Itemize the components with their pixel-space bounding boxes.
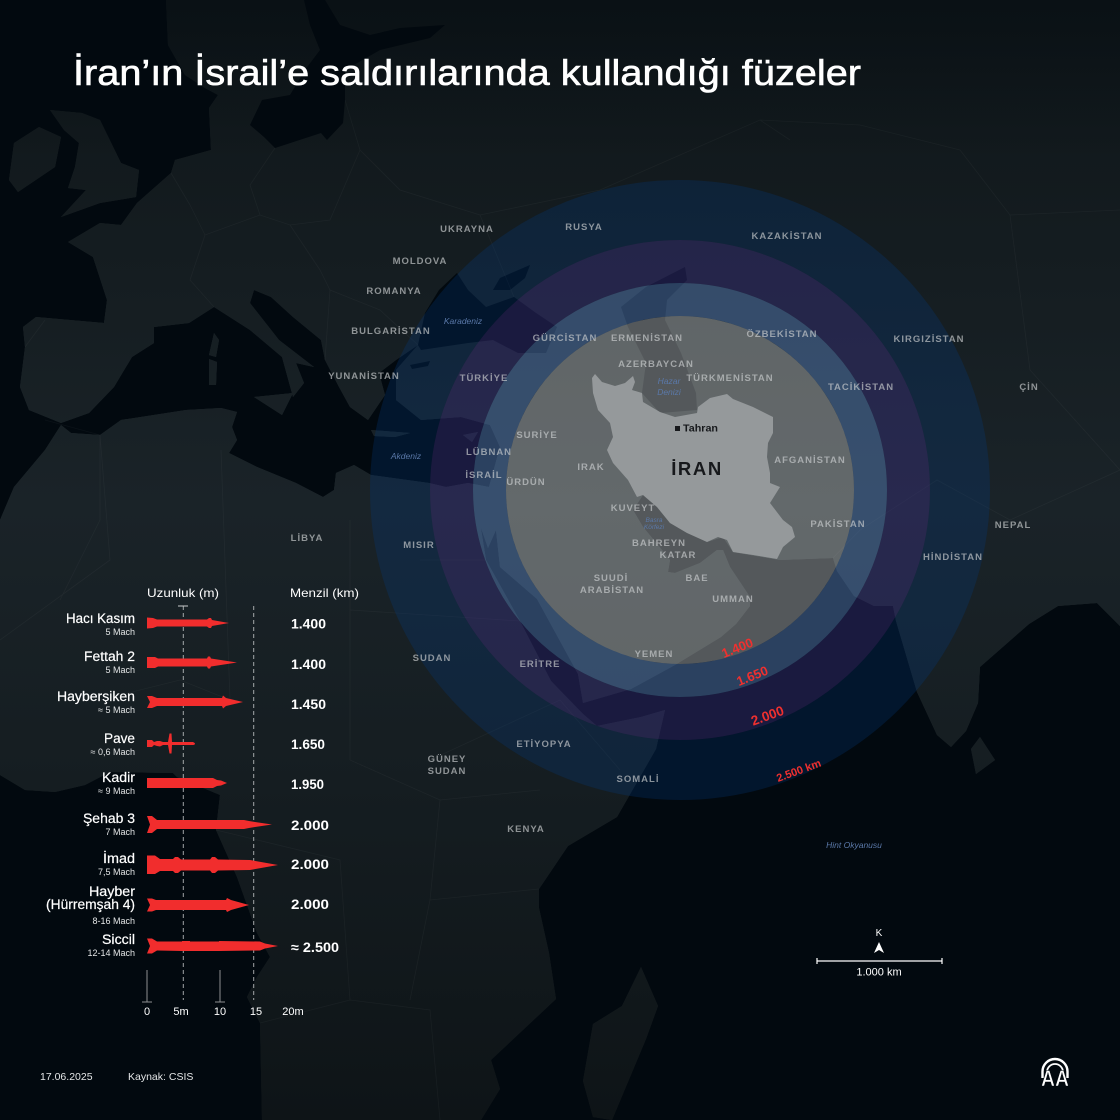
source: Kaynak: CSIS	[128, 1071, 193, 1083]
map: country and sea labels: BAHREYN	[632, 538, 686, 549]
row: Şehab 3	[83, 811, 329, 837]
row: Şehab 3: Şehab 3	[83, 811, 135, 826]
row: Hayberşiken	[57, 689, 326, 715]
row: Hayber (Hürremşah 4): Hayber	[89, 884, 136, 899]
map: country and sea labels: Hint Okyanusu	[826, 840, 882, 850]
map: country and sea labels: UMMAN	[712, 594, 754, 605]
map: country and sea labels: YUNANİSTAN	[328, 371, 400, 382]
map: country and sea labels: ÜRDÜN	[506, 477, 546, 488]
map: country and sea labels: SUDAN	[428, 766, 466, 777]
compass and scale bar: K	[876, 928, 883, 939]
map: country and sea labels: BAE	[685, 573, 709, 584]
row: Pave: Pave	[104, 731, 135, 746]
row: Hayberşiken: Hayberşiken	[57, 689, 135, 704]
map: country and sea labels: KATAR	[660, 550, 696, 561]
label: Iran and Tehran	[671, 424, 723, 479]
map: country and sea labels: Hazar	[658, 376, 681, 386]
map: country and sea labels: HİNDİSTAN	[923, 552, 983, 563]
title: İran’ın İsrail’e saldırılarında kullandığı füzeler	[73, 52, 861, 93]
row: Hayber (Hürremşah 4): (Hürremşah 4)	[46, 897, 135, 912]
row: İmad: İmad	[103, 851, 135, 866]
row: Hayber (Hürremşah 4): 8-16 Mach	[92, 916, 135, 926]
map: country and sea labels: ROMANYA	[366, 286, 422, 297]
map: country and sea labels: TÜRKİYE	[460, 373, 508, 384]
map: country and sea labels: TÜRKMENİSTAN	[686, 373, 774, 384]
range labels on the rings	[719, 635, 823, 785]
axis labels: 5m	[173, 1006, 189, 1018]
map: country and sea labels: GÜNEY	[428, 754, 466, 765]
map: country and sea labels: IRAK	[577, 462, 605, 473]
row: Pave: 1.650	[291, 737, 325, 752]
range ring: 2.000 km	[452, 262, 908, 718]
map: country and sea labels: GÜRCİSTAN	[533, 333, 597, 344]
map: country and sea labels: SURİYE	[516, 430, 558, 441]
row: Kadir: ≈ 9 Mach	[98, 786, 135, 796]
range ring: 1.650 km	[490, 300, 870, 680]
axis labels: 10	[214, 1006, 226, 1018]
map: country and sea labels: UKRAYNA	[440, 224, 494, 235]
row: Şehab 3: 2.000	[291, 818, 329, 833]
map: country and sea labels	[291, 222, 1039, 850]
map: country and sea labels: KUVEYT	[611, 503, 655, 514]
row: Hayber (Hürremşah 4)	[46, 884, 329, 926]
column heading: length: Uzunluk (m)	[147, 586, 219, 600]
row: Fettah 2	[84, 649, 326, 675]
row: Hacı Kasım: 5 Mach	[105, 627, 135, 637]
row: Kadir	[98, 770, 324, 796]
compass and scale bar	[817, 928, 942, 978]
column heading: range: Menzil (km)	[290, 586, 359, 600]
row: Pave: ≈ 0,6 Mach	[91, 747, 135, 757]
map: country and sea labels: NEPAL	[995, 520, 1031, 531]
map: country and sea labels: MOLDOVA	[393, 256, 447, 267]
map: country and sea labels: AZERBAYCAN	[618, 359, 694, 370]
map: Iran highlighted	[592, 374, 795, 559]
range labels on the rings: 1.650	[734, 663, 770, 689]
row: Kadir: Kadir	[102, 770, 136, 785]
map: country and sea labels: KAZAKİSTAN	[751, 231, 823, 242]
map: country and sea labels: TACİKİSTAN	[828, 382, 894, 393]
range ring: 2.500 km	[400, 210, 960, 770]
range circle: 1.400 km	[506, 316, 854, 664]
map: country and sea labels: KIRGIZİSTAN	[894, 334, 964, 345]
row: Siccil: ≈ 2.500	[291, 940, 339, 955]
map: country and sea labels: SUUDİ	[594, 573, 628, 584]
compass and scale bar: 1.000 km	[856, 966, 902, 978]
missile chart	[46, 586, 359, 1018]
date: 17.06.2025	[40, 1071, 93, 1083]
row: Hayberşiken: 1.450	[291, 697, 326, 712]
map: country and sea labels: ERMENİSTAN	[611, 333, 683, 344]
map: country and sea labels: İSRAİL	[465, 470, 503, 481]
map: country and sea labels: RUSYA	[565, 222, 603, 233]
map: country and sea labels: Basra	[646, 517, 663, 524]
map: country and sea labels: ARABİSTAN	[580, 585, 644, 596]
axis labels: 15	[250, 1006, 262, 1018]
row: Kadir: 1.950	[291, 777, 324, 792]
map: country and sea labels: MISIR	[403, 540, 435, 551]
label: Iran and Tehran: İRAN	[671, 458, 723, 479]
map: country and sea labels: LÜBNAN	[466, 447, 512, 458]
row: Fettah 2: 5 Mach	[105, 665, 135, 675]
range labels on the rings: 2.500 km	[775, 758, 823, 785]
map: country and sea labels: Karadeniz	[444, 316, 483, 326]
map: country and sea labels: ÇİN	[1019, 382, 1039, 393]
row: Siccil: Siccil	[102, 932, 135, 947]
row: Hacı Kasım: 1.400	[291, 616, 326, 632]
row: İmad: 7,5 Mach	[98, 867, 135, 877]
row: Siccil: 12-14 Mach	[87, 948, 135, 958]
map: country and sea labels: Körfezi	[644, 524, 665, 531]
map: country and sea labels: AFGANİSTAN	[774, 455, 846, 466]
map: country and sea labels: BULGARİSTAN	[351, 326, 431, 337]
row: Fettah 2: Fettah 2	[84, 649, 135, 664]
map: country and sea labels: ERİTRE	[520, 659, 560, 670]
length axis	[142, 606, 254, 1002]
map: country and sea labels: LİBYA	[291, 533, 323, 544]
row: İmad: 2.000	[291, 857, 329, 872]
map: country and sea labels: KENYA	[507, 824, 545, 835]
row: Şehab 3: 7 Mach	[105, 827, 135, 837]
row: Siccil	[87, 932, 339, 958]
row: Hayber (Hürremşah 4): 2.000	[291, 897, 329, 912]
map: country and sea labels: Denizi	[657, 387, 682, 397]
row: Fettah 2: 1.400	[291, 657, 326, 672]
row: İmad	[98, 851, 329, 877]
logo: AA: AA	[1041, 1066, 1069, 1091]
row: Pave	[91, 731, 325, 757]
axis labels	[144, 1006, 304, 1018]
map: country and sea labels: ÖZBEKİSTAN	[746, 329, 818, 340]
axis labels: 0	[144, 1006, 150, 1018]
map: country and sea labels: ETİYOPYA	[516, 739, 572, 750]
row: Hacı Kasım	[66, 611, 326, 637]
range labels on the rings: 1.400	[719, 635, 755, 661]
map: country and sea labels: SUDAN	[413, 653, 451, 664]
row: Hacı Kasım: Hacı Kasım	[66, 611, 135, 626]
map: country and sea labels: SOMALİ	[617, 774, 659, 785]
map: country and sea labels: YEMEN	[635, 649, 673, 660]
axis labels: 20m	[282, 1006, 304, 1018]
label: Iran and Tehran: Tahran	[683, 424, 718, 434]
range labels on the rings: 2.000	[749, 703, 786, 729]
map: country and sea labels: PAKİSTAN	[810, 519, 866, 530]
row: Hayberşiken: ≈ 5 Mach	[98, 705, 135, 715]
map: country and sea labels: Akdeniz	[390, 451, 422, 461]
